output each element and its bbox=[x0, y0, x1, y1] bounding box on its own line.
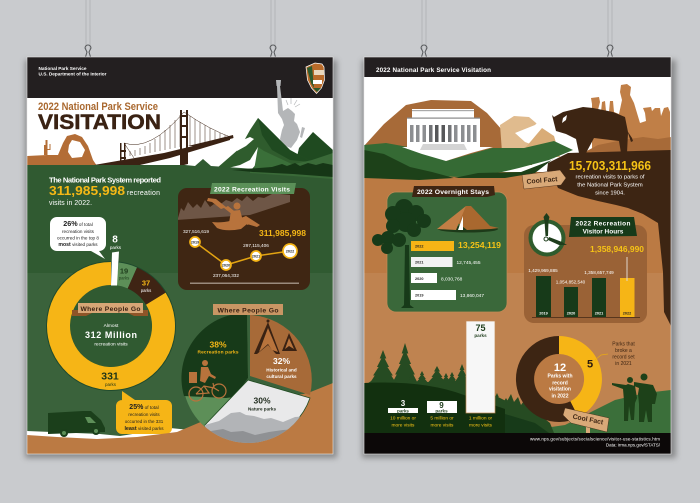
tag: overnight stays: 2022 Overnight Stays bbox=[417, 189, 489, 196]
bar: 2021: 12,745,455 bbox=[456, 260, 481, 266]
annotation: record set 2021 bbox=[595, 342, 635, 367]
label: 30 percent: Nature parks bbox=[248, 406, 276, 412]
panel: 2022 recreation visits bbox=[178, 183, 310, 290]
bar: 2022: 13,254,119 bbox=[458, 240, 501, 250]
label: 38 percent bbox=[198, 340, 239, 356]
year labels bbox=[539, 312, 631, 316]
bar: 2020: 8,030,768 bbox=[441, 276, 463, 282]
footer bar bbox=[364, 433, 671, 454]
sign: cool fact: Cool Fact bbox=[572, 414, 604, 427]
intro text: recreation bbox=[127, 190, 160, 197]
callout: 26 percent: recreation visits bbox=[62, 229, 95, 234]
callout: 25 percent: 25% of total bbox=[129, 404, 159, 411]
callout: 25 percent: occurred in the 331 bbox=[125, 419, 164, 424]
intro text: 311,985,998 bbox=[49, 184, 125, 198]
icon: clock bbox=[528, 213, 567, 256]
value labels: 327,516,619 bbox=[183, 229, 209, 234]
value labels: 1,429,969,885 bbox=[528, 268, 558, 273]
axis line bbox=[190, 282, 299, 284]
callout: 26 percent: most visited parks bbox=[58, 242, 98, 248]
bar: 75 parks: parks bbox=[474, 333, 487, 338]
dark segment bbox=[516, 336, 578, 422]
icon: desert arch bbox=[27, 134, 97, 166]
year labels: 2022 bbox=[623, 312, 631, 316]
year labels: 2021 bbox=[252, 254, 260, 258]
donut: record parks bbox=[516, 336, 602, 422]
orange ground bbox=[364, 172, 671, 434]
label: 30 percent: 30% bbox=[253, 396, 271, 406]
tag: where people go: Where People Go bbox=[218, 307, 278, 314]
bar: 2019: 13,860,047 bbox=[460, 293, 484, 299]
annotation: record set 2021: Parks that bbox=[612, 342, 635, 348]
icon: camper van bbox=[48, 411, 105, 437]
header bar bbox=[27, 57, 333, 98]
poster shadows bbox=[25, 60, 676, 458]
intro text: The National Park System reported bbox=[49, 176, 161, 184]
year labels: 2021 bbox=[595, 312, 603, 316]
panel: visitor hours bbox=[524, 213, 647, 323]
center text: in 2022 bbox=[552, 393, 569, 399]
header title: 2022 National Park Service Visitation bbox=[376, 67, 491, 74]
value labels: 237,064,332 bbox=[213, 273, 239, 278]
bar: 2020: 2020 bbox=[415, 277, 423, 281]
bar: 9 parks: parks bbox=[435, 408, 448, 414]
annotation: record set 2021: broke a bbox=[615, 348, 632, 354]
callout: 26 percent bbox=[50, 217, 106, 259]
fact text bbox=[576, 174, 645, 196]
intro text bbox=[49, 177, 160, 205]
label: 32 percent: 32% bbox=[273, 356, 290, 366]
callout: 25 percent bbox=[116, 391, 172, 434]
tag: 2022 recreation visits bbox=[210, 183, 296, 194]
bars: park counts bbox=[388, 321, 495, 428]
year labels: 2019 bbox=[539, 312, 548, 316]
icon: tent bbox=[437, 206, 499, 232]
banner: where people go: Where People Go bbox=[80, 306, 140, 313]
right treeline bbox=[250, 153, 333, 179]
orange hill bbox=[364, 100, 532, 165]
bar: 75 parks: 75 bbox=[475, 323, 486, 333]
tan peaks bbox=[500, 115, 560, 157]
bar labels: more visits bbox=[392, 422, 415, 428]
segment labels: parks bbox=[141, 288, 151, 293]
bar chart: 1,358,946,990 bbox=[590, 244, 644, 254]
bottom hills bbox=[505, 390, 671, 438]
label: 30 percent bbox=[248, 396, 276, 412]
icon: arrowhead logo bbox=[306, 63, 324, 94]
agency text: National Park Service bbox=[38, 66, 86, 71]
green segment bbox=[116, 262, 137, 288]
icon: kayaker bbox=[207, 198, 260, 230]
orange ground bbox=[27, 383, 333, 454]
statue of liberty bbox=[276, 80, 305, 148]
forest bbox=[364, 343, 518, 433]
title: VISITATION bbox=[38, 111, 161, 134]
year labels: 2020 bbox=[222, 264, 230, 268]
segment labels: parks bbox=[119, 276, 129, 280]
title: 2022 National Park Service bbox=[38, 101, 158, 113]
hoodoos bbox=[583, 84, 671, 157]
sign: cool fact: Cool Fact bbox=[526, 176, 559, 186]
title bbox=[38, 102, 160, 130]
tag: visitor hours: 2022 Recreation bbox=[576, 220, 631, 228]
center text: 312 Million bbox=[85, 330, 137, 340]
poster edge highlights bbox=[27, 57, 671, 454]
pie chart bbox=[181, 304, 313, 456]
slice: recreation parks bbox=[185, 322, 248, 427]
icon: green mountains bbox=[218, 118, 333, 168]
center text: Almost bbox=[104, 323, 119, 329]
fact number: 15,703,311,966 bbox=[569, 159, 651, 173]
bar: 3 parks bbox=[388, 399, 418, 414]
center text: visitation bbox=[549, 387, 571, 393]
value labels: 1,054,852,540 bbox=[556, 280, 586, 284]
annotation: record set 2021: in 2021 bbox=[615, 361, 632, 367]
label: 8 parks: 8 bbox=[112, 234, 118, 246]
bar labels: more visits bbox=[469, 422, 493, 428]
label: 32 percent: Historical and bbox=[266, 368, 297, 372]
bar: 2021 bbox=[411, 257, 481, 267]
segment labels: 19 bbox=[120, 266, 128, 276]
gold segment bbox=[47, 262, 175, 390]
fact text: recreation visits to parks of bbox=[576, 174, 645, 180]
bar: 2021: 2021 bbox=[415, 260, 423, 264]
annotation: record set 2021: record set bbox=[612, 354, 635, 360]
year labels bbox=[191, 240, 294, 268]
dark segment bbox=[128, 268, 166, 305]
bar labels: 10 million or bbox=[390, 416, 416, 422]
year labels: 2022 bbox=[286, 250, 294, 254]
highlighted value: 311,985,998 bbox=[259, 228, 306, 238]
callout: 26 percent: 26% of total bbox=[63, 219, 93, 228]
dark cliff bbox=[547, 150, 671, 326]
tag: 2022 recreation visits: 2022 Recreation Visits bbox=[214, 186, 290, 194]
tag: visitor hours bbox=[569, 217, 637, 237]
value labels bbox=[183, 229, 269, 278]
footer text bbox=[530, 436, 661, 448]
agency text: U.S. Department of the Interior bbox=[38, 72, 107, 76]
bar: 2022 bbox=[411, 240, 501, 251]
bar: 9 parks: 9 bbox=[439, 401, 444, 410]
label: 38 percent: 38% bbox=[209, 340, 227, 350]
segment labels: parks bbox=[105, 382, 117, 387]
label: 32 percent bbox=[266, 356, 297, 379]
bar labels: more visits bbox=[431, 422, 454, 428]
forest silhouette bbox=[178, 194, 290, 220]
callout: 26 percent: occurred in the top 8 bbox=[57, 236, 99, 240]
sign: cool fact bbox=[563, 408, 609, 433]
icon: golden gate bridge bbox=[94, 110, 234, 166]
bar labels: 5 million or bbox=[430, 416, 454, 422]
label: 32 percent: cultural parks bbox=[266, 374, 297, 379]
year labels: 2020 bbox=[567, 312, 575, 316]
bar: 2022: 2022 bbox=[415, 244, 423, 248]
bar: 2019 bbox=[411, 290, 484, 300]
bar: 3 parks: 3 bbox=[401, 399, 406, 408]
slice: historical parks bbox=[250, 315, 312, 395]
intro text: visits in 2022. bbox=[49, 200, 92, 207]
callout: 25 percent: least visited parks bbox=[124, 426, 164, 432]
hanging clips bbox=[84, 0, 614, 62]
line chart bbox=[190, 237, 297, 270]
bar: 2020 bbox=[411, 273, 463, 283]
icon: memorial bbox=[402, 109, 493, 161]
bar: 3 parks: parks bbox=[397, 408, 409, 414]
lower fold light bbox=[27, 273, 333, 438]
bar: 9 parks bbox=[427, 401, 457, 414]
center text: 12 bbox=[554, 362, 566, 374]
green ground bbox=[27, 159, 341, 436]
footer text: www.nps.gov/subjects/socialscience/visitor-use-statistics.htm bbox=[530, 436, 660, 442]
bar labels: 1 million or bbox=[469, 416, 492, 422]
fact text: the National Park System bbox=[577, 182, 643, 188]
mountains in pie bbox=[205, 412, 313, 456]
gold segment bbox=[559, 336, 602, 417]
label: 8 parks bbox=[110, 236, 121, 250]
callout: 25 percent: recreation visits bbox=[128, 412, 160, 417]
panel: left poster bbox=[27, 57, 341, 456]
center text bbox=[547, 362, 573, 399]
icon: hikers bbox=[612, 374, 657, 422]
label: 38 percent: Recreation parks bbox=[198, 350, 239, 356]
center text: record bbox=[552, 380, 568, 386]
slice: nature parks bbox=[204, 380, 310, 428]
banner: where people go bbox=[72, 303, 148, 316]
value labels: 297,115,406 bbox=[243, 243, 269, 248]
label: 8 parks: parks bbox=[110, 245, 122, 250]
value labels bbox=[528, 268, 614, 284]
bar chart bbox=[528, 244, 644, 318]
value labels: 1,358,657,749 bbox=[584, 270, 614, 275]
tag: visitor hours: Visitor Hours bbox=[583, 228, 624, 236]
value 5: 5 bbox=[587, 358, 593, 370]
segment labels: 331 bbox=[101, 370, 119, 382]
year labels: 2019 bbox=[191, 240, 199, 244]
panel: overnight stays bbox=[372, 186, 507, 312]
green hills bbox=[364, 141, 573, 180]
bar: 2019: 2019 bbox=[415, 294, 423, 298]
icon: cyclist bbox=[189, 360, 226, 401]
center text bbox=[85, 324, 136, 346]
chart points bbox=[190, 237, 297, 270]
dark ground bbox=[364, 382, 528, 433]
fact text: since 1904. bbox=[595, 190, 625, 196]
icon: tree bbox=[372, 199, 431, 308]
footer text: Data: irma.nps.gov/STATS/ bbox=[606, 442, 661, 448]
tag: where people go bbox=[213, 304, 283, 315]
icon: bison bbox=[552, 107, 633, 153]
header bar bbox=[364, 57, 671, 77]
panel: right poster bbox=[364, 57, 671, 454]
segment labels bbox=[101, 266, 151, 387]
center text: recreation visits bbox=[94, 342, 128, 348]
icon: tents bbox=[254, 320, 297, 354]
bar: 75 parks bbox=[466, 321, 495, 413]
bar labels bbox=[390, 416, 493, 428]
segment labels: 37 bbox=[142, 278, 150, 288]
donut chart bbox=[46, 252, 176, 391]
white wedge bbox=[111, 252, 119, 286]
center text: Parks with bbox=[547, 374, 573, 380]
sign: cool fact bbox=[522, 170, 566, 189]
